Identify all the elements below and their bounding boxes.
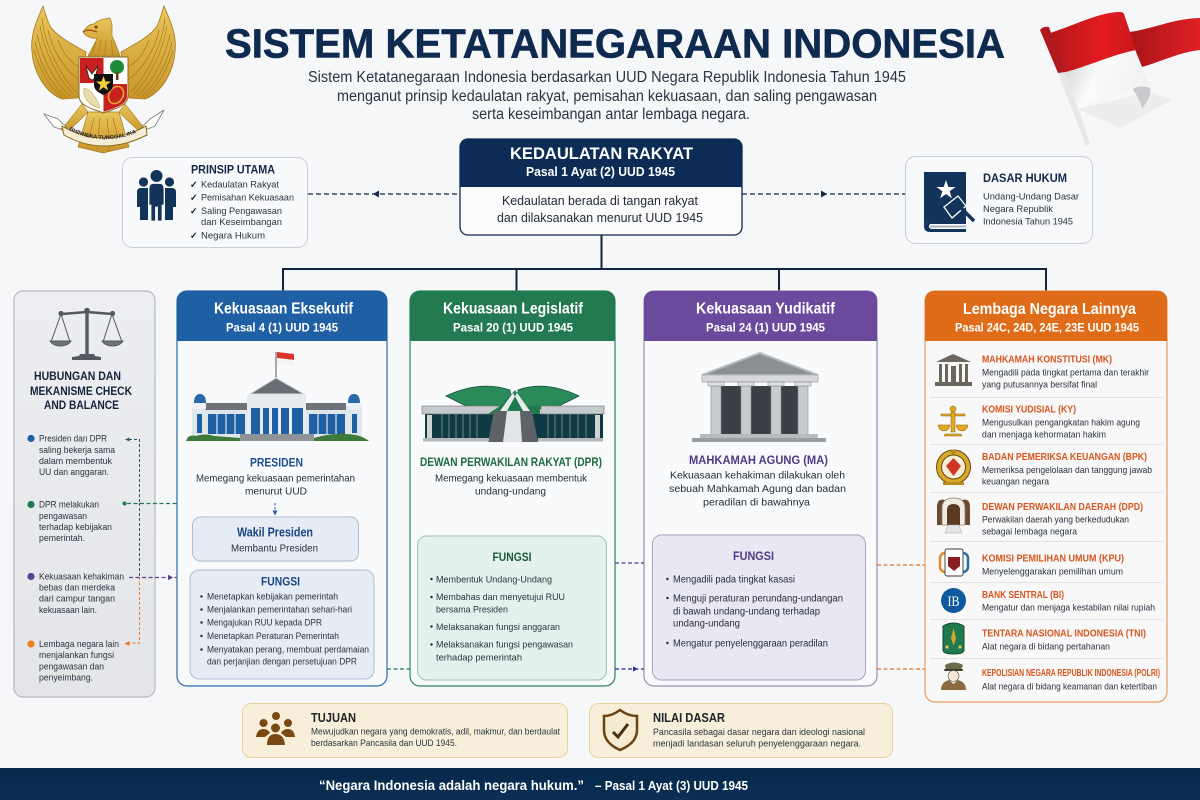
item: DPR pengawasan: pemerintah. <box>39 533 85 544</box>
item: TNI: Alat negara di bidang pertahanan <box>982 642 1110 652</box>
item: KPU: Menyelenggarakan pemilihan umum <box>982 566 1123 578</box>
checklist: Saling Pengawasan <box>201 206 282 217</box>
body text <box>669 470 846 508</box>
item: KY: Mengusulkan pengangkatan hakim agung <box>982 418 1140 428</box>
box: fungsi eksekutif: FUNGSI <box>261 574 300 588</box>
item: kekuasaan kehakiman: Kekuasaan kehakiman <box>39 572 124 582</box>
checklist: ✓ <box>190 230 198 240</box>
item: POLRI: Alat negara di bidang keamanan dan ketertiban <box>982 682 1157 692</box>
footer quote <box>0 768 1200 800</box>
body text: dan dilaksanakan menurut UUD 1945 <box>497 210 703 225</box>
item: MK: MAHKAMAH KONSTITUSI (MK) <box>982 354 1112 366</box>
item: KPU: KOMISI PEMILIHAN UMUM (KPU) <box>982 552 1124 564</box>
heading: AND BALANCE <box>44 400 119 412</box>
body text: sebuah Mahkamah Agung dan badan <box>669 484 846 495</box>
heading: Kekuasaan Yudikatif <box>696 300 836 318</box>
body text <box>196 474 355 498</box>
panel: kedaulatan rakyat <box>460 139 742 235</box>
arrow: kedaulatan to dasar hukum <box>742 190 905 198</box>
checklist: Kedaulatan Rakyat <box>201 180 279 190</box>
panel: kekuasaan eksekutif <box>177 291 387 686</box>
icon: scales of justice <box>50 308 123 360</box>
panel: prinsip utama <box>122 158 308 248</box>
box: fungsi yudikatif: Menguji peraturan perundang-undangan <box>673 594 843 604</box>
item: BPK <box>936 450 1152 488</box>
item: lembaga negara lain: menjalankan fungsi <box>39 650 114 661</box>
icon: supreme court building <box>692 353 826 442</box>
item: TNI <box>943 623 1146 654</box>
item: KPU <box>940 549 1124 578</box>
item: presiden dan DPR <box>27 434 116 478</box>
icon: people group <box>137 170 176 221</box>
box: fungsi yudikatif: undang-undang <box>673 618 740 630</box>
heading: Kekuasaan Eksekutif <box>214 300 354 318</box>
item: BPK: keuangan negara <box>982 476 1050 488</box>
panel: nilai dasar <box>590 704 892 758</box>
connector: org tree <box>282 235 1047 291</box>
panel: check and balance <box>14 291 155 697</box>
checklist: Negara Hukum <box>201 230 265 242</box>
body text: Negara Republik <box>983 204 1053 215</box>
item: KY <box>938 404 1140 440</box>
body text: undang-undang <box>475 486 546 498</box>
panel: kekuasaan legislatif <box>410 291 615 686</box>
icon: DPR building <box>422 386 604 442</box>
item: DPR pengawasan: pengawasan <box>39 511 87 522</box>
checklist: ✓ <box>190 192 198 202</box>
item: presiden dan DPR: dalam membentuk <box>39 456 112 467</box>
emblem ribbon: BHINNEKA TUNGGAL IKA <box>69 126 136 140</box>
box: fungsi yudikatif: Mengatur penyelenggaraan peradilan <box>673 638 828 650</box>
arrow: presiden to wakil <box>272 503 278 516</box>
panel: dasar hukum <box>906 156 1092 244</box>
title: SISTEM KETATANEGARAAN INDONESIA <box>225 20 1005 66</box>
icon: people <box>256 712 295 745</box>
item: POLRI <box>941 662 1160 692</box>
arrows: check and balance links <box>122 438 177 646</box>
body text <box>435 474 588 498</box>
item: MK <box>935 354 1149 390</box>
item: kekuasaan kehakiman: dari campur tangan <box>39 594 115 604</box>
body text: Memegang kekuasaan membentuk <box>435 474 588 484</box>
checklist: ✓ <box>190 206 198 216</box>
item: lembaga negara lain: penyeimbang. <box>39 672 93 684</box>
heading: DPR: DEWAN PERWAKILAN RAKYAT (DPR) <box>420 457 602 469</box>
item: kekuasaan kehakiman <box>27 572 124 616</box>
item: DPR pengawasan: terhadap kebijakan <box>39 522 112 533</box>
item: presiden dan DPR: Presiden dan DPR <box>39 434 107 444</box>
box: fungsi legislatif: Membentuk Undang-Undang <box>436 574 552 586</box>
body text: Mewujudkan negara yang demokratis, adil, makmur, dan berdaulat <box>311 726 560 738</box>
subtitle: menganut prinsip kedaulatan rakyat, pemisahan kekuasaan, dan saling pengawasan <box>337 88 877 105</box>
box: fungsi eksekutif: Menyatakan perang, membuat perdamaian <box>207 644 369 656</box>
item: BI: Mengatur dan menjaga kestabilan nilai rupiah <box>982 602 1155 614</box>
body text: Memegang kekuasaan pemerintahan <box>196 474 355 484</box>
item: presiden dan DPR: UU dan anggaran. <box>39 467 109 478</box>
body text: menjadi landasan seluruh penyelenggaraan negara. <box>653 738 861 750</box>
body text: Kedaulatan berada di tangan rakyat <box>502 193 698 208</box>
heading: MA: MAHKAMAH AGUNG (MA) <box>689 455 828 467</box>
arrow: kedaulatan to prinsip <box>308 190 460 198</box>
box: fungsi legislatif: Melaksanakan fungsi anggaran <box>436 622 560 633</box>
footer quote: “Negara Indonesia adalah negara hukum.” <box>319 778 584 793</box>
body text: Indonesia Tahun 1945 <box>983 216 1073 228</box>
article reference: Pasal 24C, 24D, 24E, 23E UUD 1945 <box>955 320 1139 334</box>
item: presiden dan DPR: saling bekerja sama <box>39 445 116 456</box>
panel: lembaga negara lainnya <box>925 291 1167 702</box>
body text <box>983 192 1079 228</box>
box: wakil presiden: Wakil Presiden <box>237 526 313 540</box>
panel: tujuan <box>242 704 568 758</box>
item: MK: Mengadili pada tingkat pertama dan terakhir <box>982 368 1149 378</box>
item: DPD <box>937 498 1143 538</box>
box: fungsi legislatif: FUNGSI <box>492 550 532 564</box>
footer quote: – Pasal 1 Ayat (3) UUD 1945 <box>595 778 748 793</box>
box: fungsi eksekutif: Menetapkan kebijakan pemerintah <box>207 592 338 602</box>
heading: Lembaga Negara Lainnya <box>963 301 1136 318</box>
body text: peradilan di bawahnya <box>703 498 810 508</box>
checklist: dan Keseimbangan <box>201 217 282 228</box>
item: BI: BANK SENTRAL (BI) <box>982 589 1064 601</box>
heading: KEDAULATAN RAKYAT <box>510 145 693 163</box>
subtitle <box>308 69 906 123</box>
item: DPR pengawasan: DPR melakukan <box>39 500 99 510</box>
box: fungsi eksekutif: Mengajukan RUU kepada DPR <box>207 618 322 628</box>
body text: Pancasila sebagai dasar negara dan ideologi nasional <box>653 727 865 738</box>
item: DPD: DEWAN PERWAKILAN DAERAH (DPD) <box>982 501 1143 513</box>
checklist: Pemisahan Kekuasaan <box>201 192 294 204</box>
item: lembaga negara lain: pengawasan dan <box>39 662 104 672</box>
article reference: Pasal 24 (1) UUD 1945 <box>706 320 825 334</box>
heading <box>30 371 133 412</box>
item: TNI: TENTARA NASIONAL INDONESIA (TNI) <box>982 628 1146 640</box>
item: BI: IB <box>948 594 960 610</box>
emblem: Garuda Pancasila <box>31 5 176 154</box>
heading: presiden: PRESIDEN <box>250 456 303 470</box>
heading: Kekuasaan Legislatif <box>443 300 584 318</box>
body text <box>311 726 560 749</box>
box: fungsi eksekutif: Menjalankan pemerintahan sehari-hari <box>207 604 352 616</box>
emblem shield <box>79 57 128 113</box>
box: fungsi eksekutif: Menetapkan Peraturan Pemerintah <box>207 631 339 642</box>
item: BI <box>941 588 1155 614</box>
item: kekuasaan kehakiman: kekuasaan lain. <box>39 605 97 616</box>
box: fungsi legislatif: terhadap pemerintah <box>436 652 522 664</box>
heading: DASAR HUKUM <box>983 173 1067 185</box>
heading: MEKANISME CHECK <box>30 386 133 398</box>
item: lembaga negara lain <box>27 639 119 684</box>
body text: Undang-Undang Dasar <box>983 192 1079 202</box>
arrows: links between power panels <box>387 563 925 672</box>
item: KY: dan menjaga kehormatan hakim <box>982 430 1106 440</box>
item: KY: KOMISI YUDISIAL (KY) <box>982 404 1076 416</box>
emblem ribbon <box>43 110 164 146</box>
icon: presidential palace <box>186 352 369 441</box>
heading: NILAI DASAR <box>653 711 725 725</box>
body text: menurut UUD <box>245 486 307 498</box>
item: DPR pengawasan <box>27 500 112 544</box>
item: MK: yang putusannya bersifat final <box>982 380 1097 390</box>
article reference: Pasal 1 Ayat (2) UUD 1945 <box>526 165 675 179</box>
item: DPD: Perwakilan daerah yang berkedudukan <box>982 514 1129 526</box>
article reference: Pasal 4 (1) UUD 1945 <box>226 320 338 334</box>
box: fungsi legislatif: Membahas dan menyetujui RUU <box>436 592 565 603</box>
subtitle: Sistem Ketatanegaraan Indonesia berdasarkan UUD Negara Republik Indonesia Tahun 1945 <box>308 69 906 86</box>
box: fungsi yudikatif <box>652 535 866 680</box>
box: fungsi legislatif <box>418 536 606 680</box>
box: fungsi eksekutif: dan perjanjian dengan persetujuan DPR <box>207 656 357 668</box>
subtitle: serta keseimbangan antar lembaga negara. <box>472 106 750 123</box>
item: BPK: BADAN PEMERIKSA KEUANGAN (BPK) <box>982 451 1147 463</box>
body text <box>653 727 865 750</box>
item: lembaga negara lain: Lembaga negara lain <box>39 639 119 650</box>
panel: kekuasaan yudikatif <box>644 291 877 686</box>
box: fungsi legislatif: bersama Presiden <box>436 604 508 616</box>
icon: shield with check <box>604 710 637 750</box>
article reference: Pasal 20 (1) UUD 1945 <box>453 320 573 334</box>
box: fungsi yudikatif: Mengadili pada tingkat kasasi <box>673 574 795 586</box>
item: DPD: sebagai lembaga negara <box>982 526 1078 538</box>
box: fungsi eksekutif <box>190 570 374 679</box>
heading: PRINSIP UTAMA <box>191 164 275 176</box>
item: BPK: Memeriksa pengelolaan dan tanggung jawab <box>982 465 1152 476</box>
box: fungsi yudikatif: FUNGSI <box>733 549 774 563</box>
box: wakil presiden <box>192 517 358 561</box>
dividers between agencies <box>930 398 1163 658</box>
checklist: ✓ <box>190 180 198 190</box>
body text: berdasarkan Pancasila dan UUD 1945. <box>311 738 457 749</box>
heading: TUJUAN <box>311 711 356 725</box>
box: fungsi legislatif: Melaksanakan fungsi pengawasan <box>436 640 573 650</box>
box: wakil presiden: Membantu Presiden <box>231 544 318 554</box>
box: fungsi yudikatif: di bawah undang-undang terhadap <box>673 606 820 618</box>
heading: HUBUNGAN DAN <box>34 371 121 383</box>
icon: law book and gavel <box>924 172 974 232</box>
body text: Kekuasaan kehakiman dilakukan oleh <box>670 470 845 482</box>
icon: Indonesian flag <box>1040 12 1200 146</box>
body text <box>497 193 703 225</box>
checklist <box>190 180 294 242</box>
item: kekuasaan kehakiman: bebas dan merdeka <box>39 582 116 594</box>
